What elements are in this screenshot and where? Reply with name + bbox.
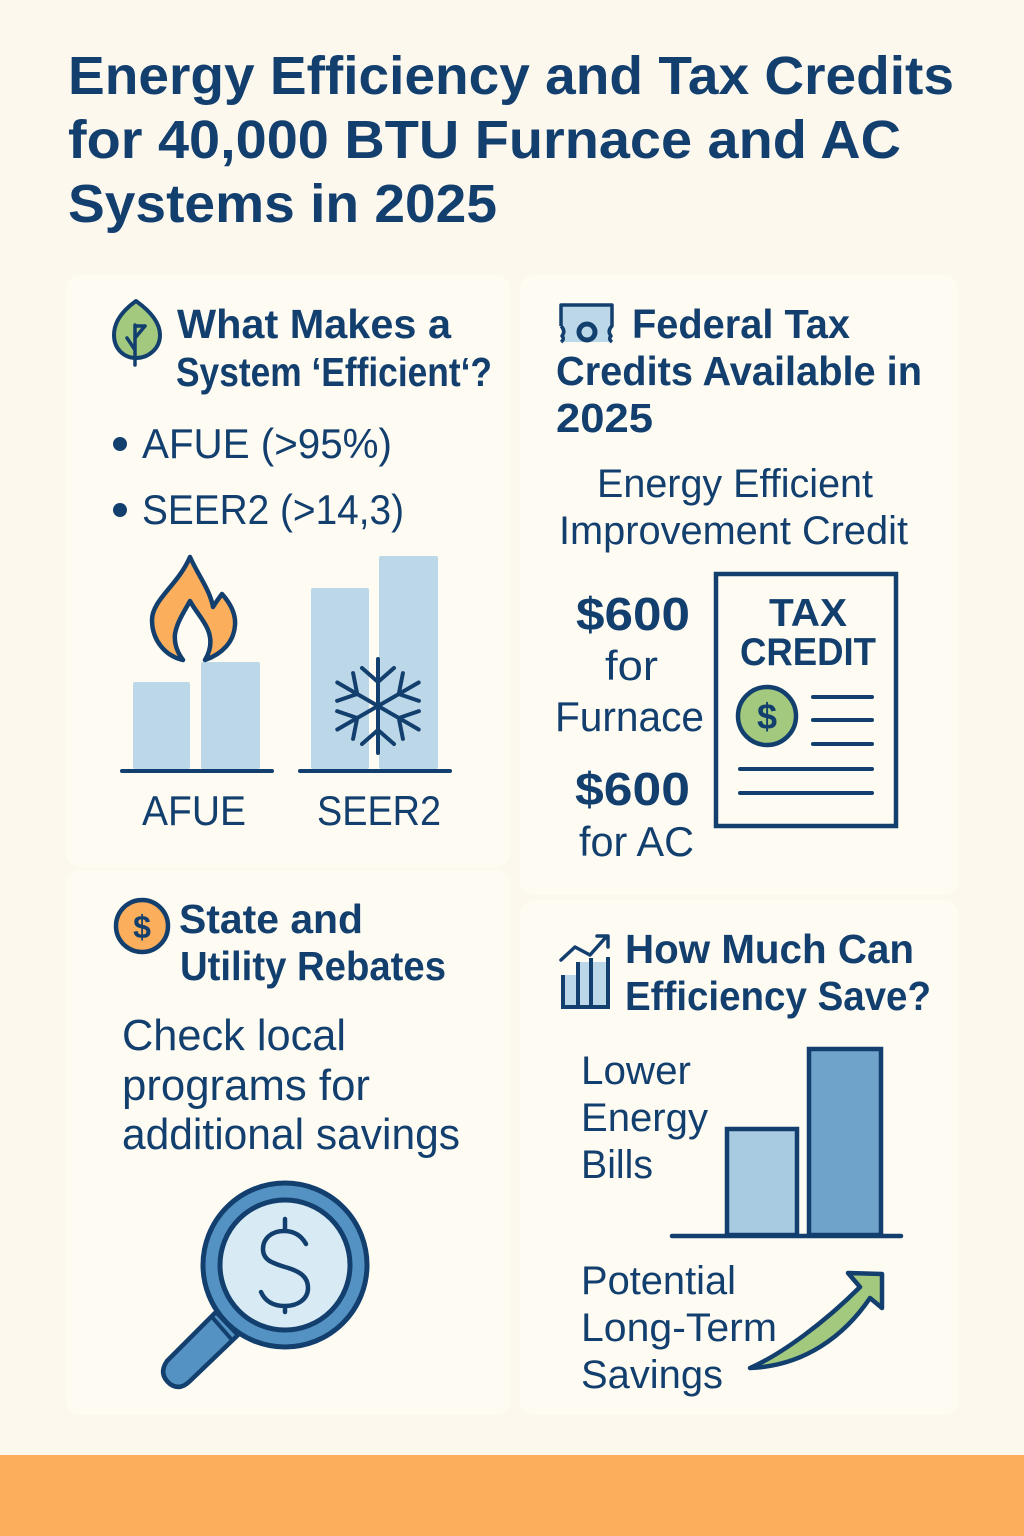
heading: state and utility rebates: State and xyxy=(179,896,363,942)
heading: how much can efficiency save: How Much Can xyxy=(625,926,914,972)
text: lower energy bills xyxy=(581,1049,708,1187)
icon: tax credit document xyxy=(716,574,896,826)
text: long-term savings xyxy=(581,1259,777,1397)
heading: state and utility rebates xyxy=(179,896,446,989)
bar chart: AFUE xyxy=(122,662,272,834)
heading: federal tax credits: 2025 xyxy=(556,395,653,441)
icon: tax credit document: TAX xyxy=(769,592,847,635)
bar chart: SEER2: SEER2 xyxy=(317,787,441,834)
title: Systems in 2025 xyxy=(68,174,497,234)
text: AC credit amount: for AC xyxy=(579,818,694,865)
bullet list: efficiency ratings xyxy=(113,420,404,533)
text: lower energy bills: Lower xyxy=(581,1049,691,1093)
icon: ticket xyxy=(561,305,612,342)
title: for 40,000 BTU Furnace and AC xyxy=(68,110,901,170)
text: furnace credit amount xyxy=(555,588,704,740)
text: furnace credit amount: for xyxy=(605,642,658,689)
bullet list: efficiency ratings: AFUE (>95%) xyxy=(142,420,392,467)
icon: snowflake xyxy=(329,659,427,753)
text: long-term savings: Savings xyxy=(581,1353,723,1397)
icon: magnifying glass with dollar xyxy=(163,1183,367,1387)
icon: dollar coin: $ xyxy=(133,909,151,945)
text: check local programs: programs for xyxy=(122,1061,370,1110)
text: lower energy bills: Energy xyxy=(581,1096,708,1140)
text: credit name xyxy=(559,462,908,553)
text: long-term savings: Potential xyxy=(581,1259,736,1303)
icon: dollar coin xyxy=(116,900,168,952)
arrow: savings growth xyxy=(750,1273,882,1368)
panel: federal tax credits xyxy=(520,275,958,895)
panel: state and utility rebates xyxy=(66,870,510,1415)
text: credit name: Energy Efficient xyxy=(597,462,873,506)
heading: state and utility rebates: Utility Rebates xyxy=(180,943,446,989)
heading: what makes a system efficient: What Makes a xyxy=(177,301,452,347)
icon: tax credit document: CREDIT xyxy=(740,631,876,674)
panel: how much can efficiency save xyxy=(520,900,958,1415)
icon: flame xyxy=(152,557,235,660)
text: check local programs: additional savings xyxy=(122,1110,460,1159)
text: furnace credit amount: Furnace xyxy=(555,693,704,740)
heading: how much can efficiency save xyxy=(625,926,931,1019)
heading: federal tax credits: Federal Tax xyxy=(632,301,850,347)
icon: tax credit document: $ xyxy=(757,696,777,737)
bar chart: SEER2 xyxy=(300,556,450,834)
bar chart: energy bills xyxy=(672,1049,901,1236)
title: Energy Efficiency and Tax Credits xyxy=(68,46,954,106)
text: check local programs: Check local xyxy=(122,1011,346,1060)
text: AC credit amount xyxy=(575,763,694,865)
text: check local programs xyxy=(122,1011,460,1159)
heading: what makes a system efficient xyxy=(176,301,492,395)
text: lower energy bills: Bills xyxy=(581,1143,653,1187)
icon: leaf xyxy=(114,301,160,365)
heading: how much can efficiency save: Efficiency Save? xyxy=(625,973,931,1019)
panel: what makes a system efficient xyxy=(66,275,510,867)
footer band xyxy=(0,1455,1024,1536)
heading: federal tax credits xyxy=(556,301,922,441)
text: long-term savings: Long-Term xyxy=(581,1306,777,1350)
text: furnace credit amount: $600 xyxy=(576,588,690,640)
title xyxy=(68,46,954,234)
text: credit name: Improvement Credit xyxy=(559,509,908,553)
heading: what makes a system efficient: System ‘Efficient‘? xyxy=(176,349,492,395)
icon: growth chart xyxy=(561,936,608,1007)
bar chart: AFUE: AFUE xyxy=(142,787,246,834)
bullet list: efficiency ratings: SEER2 (>14,3) xyxy=(142,486,404,533)
heading: federal tax credits: Credits Available in xyxy=(556,348,922,394)
text: AC credit amount: $600 xyxy=(575,763,690,815)
